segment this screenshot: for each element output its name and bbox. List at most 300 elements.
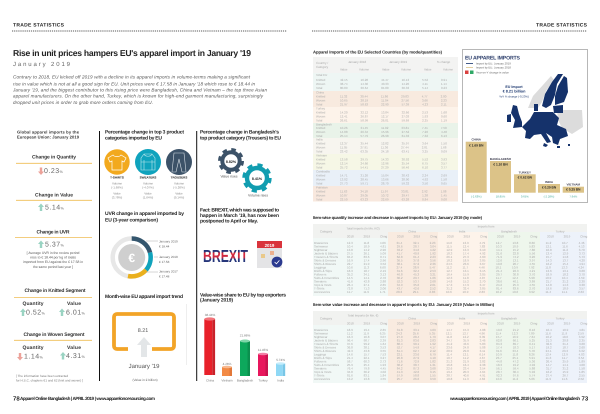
table rows: 14.20 32.12 13.84 32.66 2.53 1.68 bbox=[340, 110, 447, 114]
donut legend: January 2019 bbox=[159, 240, 178, 244]
intro paragraph: January '19, and the biggest contributor to this rising price were Bangladesh, China and Vietnam – the top three Asian bbox=[12, 88, 267, 92]
table header: Volume bbox=[443, 68, 453, 72]
stat: woven segment: Change in Woven Segment bbox=[24, 332, 85, 338]
table: country imports bbox=[313, 57, 458, 202]
table rows: 10.87 29.05 10.72 29.47 1.38 1.45 bbox=[340, 194, 447, 198]
bar: Bangladesh: 18.85% bbox=[496, 194, 506, 198]
table rows: 27.5 26.1 5.09 41.7 40.9 1.92 18.3 17.4 4.92 21.6 22.8 5.56 13.4 12.9 3.73 bbox=[347, 252, 585, 256]
stat: knitted segment: Value bbox=[67, 301, 81, 307]
month label: January '19 bbox=[129, 363, 160, 370]
heading: (January 2019) bbox=[200, 298, 233, 304]
table header: January 2019 bbox=[389, 60, 408, 64]
table header and bands: Turkey bbox=[555, 230, 565, 234]
bar: Turkey: TURKEY bbox=[519, 170, 531, 174]
table rows: Sweaters bbox=[314, 280, 327, 284]
heading: Percentage change in top 3 product bbox=[105, 130, 184, 136]
table rows: 14.71 31.26 15.04 30.42 2.24 2.69 bbox=[340, 174, 447, 178]
column divider 1 bbox=[98, 131, 100, 381]
table rows bbox=[314, 328, 585, 381]
map legend: Import by EU, January 2019 bbox=[476, 62, 511, 66]
table rows: Nightwear bbox=[314, 248, 328, 252]
header: right page: TRADE STATISTICS bbox=[536, 22, 588, 28]
icon: sweater bbox=[135, 149, 161, 175]
table header and bands: Bangladesh bbox=[501, 316, 517, 320]
value label: Value rises bbox=[220, 174, 238, 178]
table header and bands: China bbox=[408, 230, 416, 234]
bar: Turkey bbox=[258, 348, 268, 382]
table header and bands: Total Imports (in Mn. €) bbox=[348, 314, 378, 318]
footer: right page bbox=[449, 396, 589, 402]
Brexit lettering: BREXIT bbox=[203, 246, 248, 266]
table rows: Knitted bbox=[316, 142, 326, 146]
map total label: € 8.21 billion bbox=[503, 90, 526, 94]
fact text: Fact: BREXIT, which was supposed to bbox=[200, 208, 279, 214]
bar: India bbox=[538, 180, 560, 198]
table rows: 13.8 14.2 2.90 33.2 34.6 4.22 12.9 13.3 3.10 14.1 15.2 7.80 10.8 11.2 3.70 bbox=[347, 248, 585, 252]
heading: categories imported by EU bbox=[105, 136, 162, 142]
footer: left page: 78 bbox=[13, 396, 20, 402]
table rows: Total bbox=[316, 198, 323, 202]
icon: value gear: 8.82% bbox=[226, 160, 237, 164]
donut chart: € bbox=[128, 251, 135, 265]
table rows: Woven bbox=[316, 130, 326, 134]
table rows: Knitted bbox=[316, 174, 326, 178]
table header and bands: India bbox=[459, 230, 466, 234]
table rows: 26.61 58.99 26.01 59.69 2.25 1.19 bbox=[340, 118, 447, 122]
bar: Turkey bbox=[514, 170, 536, 198]
source note bbox=[16, 374, 83, 382]
table rows: Knitted bbox=[316, 126, 326, 130]
stat: change in UVR: Change in UVR bbox=[36, 230, 70, 236]
bar: Turkey: € 0.62 BN bbox=[518, 176, 533, 180]
table header: Value bbox=[340, 68, 348, 72]
table header: January 2018 bbox=[348, 60, 367, 64]
table rows: 10.6 11.3 6.60 27.4 28.9 5.47 11.2 11.7 4.46 10.1 10.9 7.92 11.8 12.3 4.24 bbox=[347, 266, 584, 270]
table header and bands bbox=[313, 311, 588, 383]
table rows: Jackets & Blazers bbox=[314, 338, 338, 342]
table rows: Pullovers bbox=[314, 272, 327, 276]
intro paragraph: apparel manufacturers. On the other hand, Turkey, which is known for high-end garment manufacturing, surprisingly bbox=[13, 94, 264, 98]
table header: Category bbox=[316, 65, 329, 69]
category stats: SWEATERS bbox=[140, 176, 156, 180]
table rows: 25.9 25.4 1.93 38.2 38.7 1.31 16.8 16.4 2.38 18.3 19.2 4.92 14.7 14.1 4.08 bbox=[347, 363, 585, 367]
table rows: 18.9 19.4 2.65 31.8 33.1 4.09 14.7 15.3 4.08 19.6 21.2 8.16 10.4 10.9 4.81 bbox=[347, 328, 585, 332]
category stats: Volume bbox=[112, 182, 122, 186]
panel: Brexit fact bbox=[200, 208, 282, 268]
heading: Value-wise share to EU by top exporters bbox=[200, 292, 286, 298]
unit note: (Value in € billion) bbox=[132, 378, 158, 382]
table rows: Total EU bbox=[316, 73, 327, 77]
category stats: Volume bbox=[174, 182, 184, 186]
table: item-wise value bbox=[313, 311, 588, 383]
table rows: 81.6 83.1 1.84 57.9 58.8 1.55 38.7 40.6 4.91 92.3 97.6 5.74 27.4 26.7 2.55 bbox=[347, 374, 585, 378]
table rows: 22.7 21.9 3.52 38.1 37.2 2.36 24.5 23.6 3.67 19.8 20.7 4.55 16.2 15.4 4.94 bbox=[347, 262, 585, 266]
stat: knitted segment: Change in Knitted Segment bbox=[24, 288, 86, 294]
table header and bands: Total Imports (in Mn. KG) bbox=[346, 226, 380, 230]
table rows: 16.3 16.8 3.07 27.9 28.4 1.79 11.8 12.2 3.39 15.7 16.9 7.64 10.2 10.6 3.92 bbox=[347, 335, 585, 339]
table rows: 10.4 10.9 4.81 29.6 28.7 3.04 11.5 12.4 7.83 10.3 10.9 5.83 12.1 11.6 4.13 bbox=[347, 244, 585, 248]
table rows: Woven bbox=[316, 146, 326, 150]
table rows: Knitted bbox=[316, 190, 326, 194]
table rows: Suits & Ensembles bbox=[314, 363, 340, 367]
stat: knitted segment: 0.52% bbox=[26, 310, 46, 316]
source note: [ The information have been extracted bbox=[16, 374, 68, 378]
stat: woven segment: 1.14% bbox=[24, 354, 44, 360]
map total label bbox=[499, 85, 529, 98]
bar: Vietnam: 4.26% bbox=[223, 362, 232, 366]
stat: woven segment bbox=[14, 332, 92, 360]
bar: Bangladesh bbox=[490, 157, 511, 198]
panel heading: European Union: January 2019 bbox=[17, 134, 80, 140]
table rows: 12.37 35.44 12.82 35.97 3.64 1.50 bbox=[340, 142, 447, 146]
bar: India: INDIA bbox=[545, 180, 554, 184]
category stats: TROUSERS bbox=[171, 176, 187, 180]
bar: India: India bbox=[277, 378, 284, 382]
table rows: 80.89 30.64 84.80 30.33 5.14 0.23 bbox=[340, 86, 447, 90]
table rows: Swimwear bbox=[314, 244, 328, 248]
table rows: Tops & Vests bbox=[314, 370, 332, 374]
value: 8.21 bbox=[138, 328, 148, 334]
table rows: Total bbox=[316, 166, 323, 170]
bar: Turkey: Turkey bbox=[258, 378, 268, 382]
donut legend: January 2017 bbox=[159, 270, 178, 274]
icon: trousers bbox=[166, 149, 192, 175]
bar: Turkey: 0.65% bbox=[521, 194, 529, 198]
table rows: Pakistan bbox=[316, 186, 328, 190]
heading: Percentage change in Bangladesh's bbox=[200, 130, 279, 136]
table rows: 36.8 38.1 3.53 52.7 54.9 4.17 23.6 24.8 5.08 17.4 18.3 5.17 19.2 18.7 2.60 bbox=[347, 346, 585, 350]
panel: left stats column bbox=[14, 130, 92, 382]
table rows: 84.2 83.6 0.71 62.8 61.4 2.23 26.1 27.3 4.60 71.9 74.2 3.20 15.7 14.8 5.73 bbox=[347, 255, 585, 259]
table rows: Sweaters bbox=[314, 366, 327, 370]
bar: India: (-2.28%) bbox=[544, 194, 554, 198]
table rows bbox=[314, 241, 585, 294]
heading: Month-wise EU apparel import trend bbox=[105, 294, 183, 300]
bar: India bbox=[276, 358, 285, 382]
stat: change in quantity: 0.23% bbox=[44, 168, 64, 175]
UVR note: the same period last year ] bbox=[33, 265, 73, 269]
donut legend: € 18.44 bbox=[159, 244, 170, 248]
category stats: (1.64%) bbox=[143, 196, 153, 200]
bar: Vietnam: VIETNAM bbox=[567, 183, 581, 187]
table header bbox=[313, 57, 458, 73]
table rows: Leggings bbox=[314, 352, 327, 356]
panel: Bangladesh trousers bbox=[200, 130, 281, 198]
category stats: (-1.69%) bbox=[111, 186, 123, 190]
intro paragraph: Contrary to 2018, EU kicked off 2019 with a decline in its apparel imports in volume-terms making a significant bbox=[13, 74, 251, 80]
map legend: Year-on-Y change in value bbox=[476, 70, 509, 74]
header: left page: TRADE STATISTICS bbox=[13, 22, 65, 28]
category stats: (3.78%) bbox=[112, 196, 122, 200]
stat: change in quantity bbox=[16, 154, 92, 175]
table rows: 11.2 11.9 6.25 24.3 25.6 5.35 12.1 12.7 4.96 11.4 12.3 7.89 11.6 11.9 2.59 bbox=[347, 332, 584, 336]
stat: change in UVR bbox=[15, 230, 92, 248]
table rows: Accessories bbox=[314, 290, 331, 294]
table rows: Woven bbox=[316, 162, 326, 166]
table rows: 14.6 15.7 7.53 22.1 23.6 6.79 11.4 12.1 6.14 10.9 11.8 8.26 12.4 12.9 4.03 bbox=[347, 352, 585, 356]
intro paragraph bbox=[12, 74, 267, 105]
table rows: 10.26 31.45 11.02 33.81 7.41 7.50 bbox=[340, 126, 447, 130]
bar: China: 38.44% bbox=[205, 313, 215, 317]
table title: item-wise value: Item-wise value increase and decrease in apparel imports by EU: January 2019 (Value in Million) bbox=[313, 302, 495, 307]
panel: exporters bar chart bbox=[200, 292, 286, 382]
icon: calendar: 2019 bbox=[265, 243, 275, 248]
table header and bands: India bbox=[459, 316, 466, 320]
table rows: Knitted bbox=[316, 78, 326, 82]
table rows: Cambodia bbox=[316, 170, 330, 174]
column divider 2 bbox=[196, 131, 198, 381]
table rows: Trousers & Shorts bbox=[314, 255, 339, 259]
table rows: 25.14 57.79 26.98 61.33 7.32 6.13 bbox=[340, 134, 447, 138]
category stats: Value bbox=[113, 192, 121, 196]
table rows: Total bbox=[316, 102, 323, 106]
panel: top 3 product categories bbox=[104, 130, 192, 200]
table header: Value bbox=[382, 68, 390, 72]
table rows: Skirts & Dresses bbox=[314, 346, 337, 350]
table rows: Woven bbox=[316, 114, 326, 118]
map total label: YoY % change (-0.23%) bbox=[499, 94, 529, 98]
bar: Vietnam: Vietnam bbox=[221, 378, 233, 382]
table rows: Woven bbox=[316, 82, 326, 86]
bar: Vietnam: € 0.25 BN bbox=[566, 188, 581, 192]
map legend bbox=[465, 62, 511, 74]
table rows: Vietnam bbox=[316, 154, 327, 158]
bar: Vietnam bbox=[563, 183, 584, 198]
table rows: Accessories bbox=[314, 377, 331, 381]
map legend: Import by EU, January 2018 bbox=[476, 66, 511, 70]
table header and bands: Turkey bbox=[555, 316, 565, 320]
table rows: 11.32 30.44 11.86 29.83 4.77 2.00 bbox=[340, 94, 447, 98]
stat: change in UVR: 5.37% bbox=[45, 242, 65, 248]
table rows bbox=[316, 73, 447, 202]
table rows: 13.02 28.45 13.66 28.90 4.92 1.58 bbox=[340, 178, 447, 182]
table rows: Knitted bbox=[316, 94, 326, 98]
UVR note bbox=[23, 251, 83, 269]
table rows: 12.14 24.66 12.96 25.54 6.75 3.57 bbox=[340, 162, 447, 166]
table rows: Woven bbox=[316, 178, 326, 182]
table rows: Briefs & Slips bbox=[314, 269, 332, 273]
heading: EU (3-year comparison) bbox=[105, 218, 158, 224]
table rows: Knitted bbox=[316, 158, 326, 162]
table rows: 21.97 58.63 22.90 57.39 4.23 2.11 bbox=[340, 102, 447, 106]
stat: change in quantity: Change in Quantity bbox=[32, 154, 76, 160]
donut legend: € 17.48 bbox=[159, 274, 170, 278]
table rows: 97.6 99.2 1.64 88.4 90.1 1.92 41.2 43.6 5.83 84.3 89.7 6.41 32.6 31.4 3.68 bbox=[347, 342, 585, 346]
bar: Bangladesh: BANGLADESH bbox=[490, 157, 511, 161]
table rows: 11.05 27.91 11.36 27.44 2.81 1.68 bbox=[340, 146, 447, 150]
donut legend: January 2018 bbox=[159, 255, 178, 259]
date subtitle: January 2019 bbox=[13, 61, 71, 68]
table rows: 42.15 16.28 44.47 16.13 5.52 0.91 bbox=[340, 78, 447, 82]
icon: up arrow bbox=[137, 337, 151, 357]
bar: China bbox=[466, 138, 487, 198]
stat: knitted segment: 6.01% bbox=[66, 310, 86, 316]
intro paragraph: dropped unit prices in order to grab more orders coming from EU. bbox=[13, 100, 153, 105]
table rows: 10.65 28.19 11.04 27.56 3.66 2.23 bbox=[340, 98, 447, 102]
category stats: T-SHIRTS bbox=[110, 176, 124, 180]
bar: China: € 1.69 BN bbox=[469, 144, 484, 148]
table rows: 12.41 26.87 12.17 27.03 1.93 0.60 bbox=[340, 114, 447, 118]
panel frame bbox=[462, 50, 588, 202]
stat: knitted segment bbox=[14, 288, 92, 316]
table rows: 41.6 42.8 2.88 52.3 53.7 2.68 14.8 15.2 2.70 38.6 40.1 3.89 21.7 21.2 2.30 bbox=[347, 280, 585, 284]
table rows: Suits & Ensembles bbox=[314, 276, 340, 280]
bar: Bangladesh: Bangladesh bbox=[237, 378, 253, 382]
table rows: Woven bbox=[316, 98, 326, 102]
table rows: Trousers & Shorts bbox=[314, 342, 339, 346]
table rows: China bbox=[316, 90, 324, 94]
table rows: 11.63 34.18 11.97 33.81 2.92 1.08 bbox=[340, 190, 447, 194]
table rows: Briefs & Slips bbox=[314, 356, 332, 360]
donut legend: € 17.58 bbox=[159, 260, 170, 264]
category stats: Value bbox=[144, 192, 152, 196]
table header and bands: Category bbox=[320, 316, 333, 320]
map total label: EU Import bbox=[505, 85, 523, 89]
table rows: 35.2 34.1 3.13 46.8 45.3 3.21 16.4 15.9 3.05 29.7 30.8 3.70 18.9 18.2 3.70 bbox=[347, 272, 585, 276]
table rows: 72.8 71.3 2.06 43.7 42.6 2.52 31.2 32.4 3.85 81.4 83.6 2.70 19.6 18.9 3.57 bbox=[347, 286, 585, 290]
table title: country imports: Apparel Imports of the EU Selected Countries (by mode/quantities) bbox=[313, 50, 443, 54]
table header: % change bbox=[437, 60, 451, 64]
bar: India: € 0.29 BN bbox=[542, 186, 557, 190]
icon: volume gear: 8.41% bbox=[252, 177, 263, 181]
table header and bands: Category bbox=[320, 230, 333, 234]
table rows: Total bbox=[316, 182, 323, 186]
donut legend bbox=[146, 240, 178, 278]
category stats: (-5.26%) bbox=[173, 186, 185, 190]
footer: left page bbox=[13, 396, 155, 402]
table rows: Total bbox=[316, 150, 323, 154]
intro paragraph: rise in value which is not at all a good sign for EU. Unit prices were € 17.58 in January '18 which rose to € 18.44 in bbox=[13, 82, 255, 86]
bar: Vietnam: 7.94% bbox=[569, 194, 578, 198]
table header: Volume bbox=[359, 68, 369, 72]
table header: Volume bbox=[401, 68, 411, 72]
footer: right page: 73 bbox=[582, 396, 589, 402]
bar: Vietnam bbox=[221, 362, 233, 382]
table rows: Turkey bbox=[316, 106, 326, 110]
table rows: 25.72 54.41 27.29 56.46 6.10 3.77 bbox=[340, 166, 447, 170]
category stats: (9.14%) bbox=[174, 196, 184, 200]
table header and bands: Bangladesh bbox=[501, 230, 517, 234]
table rows: 58.7 60.3 2.73 71.6 72.9 1.82 21.3 21.9 2.82 44.8 47.2 5.36 26.4 25.9 1.89 bbox=[347, 360, 585, 364]
table rows: T-Shirts bbox=[314, 286, 325, 290]
bar: Bangladesh bbox=[237, 334, 253, 382]
table rows: Skirts & Dresses bbox=[314, 258, 337, 262]
category stats: (-4.07%) bbox=[142, 186, 154, 190]
stat: woven segment: 4.31% bbox=[66, 353, 86, 360]
table header: Country / bbox=[316, 61, 328, 65]
table rows: Woven bbox=[316, 194, 326, 198]
panel heading: Global apparel imports by the bbox=[17, 130, 80, 134]
table rows: 23.42 63.35 24.18 63.41 3.25 0.09 bbox=[340, 150, 447, 154]
table rows: Knitted bbox=[316, 110, 326, 114]
table rows: 22.50 63.23 22.69 63.28 0.84 0.08 bbox=[340, 198, 447, 202]
category stats: Value bbox=[175, 192, 183, 196]
table header and bands: Imports from bbox=[478, 224, 495, 228]
title: Rise in unit prices hampers EU's apparel import in January '19 bbox=[13, 48, 251, 58]
table title: item-wise quantity: Item-wise quantity increase and decrease in apparel imports by EU: January 2019 (by mode) bbox=[313, 215, 483, 220]
table rows: Total bbox=[316, 118, 323, 122]
table rows: Shirts & Blouses bbox=[314, 349, 337, 353]
heading: UVR change in apparel imported by bbox=[105, 211, 184, 217]
table rows: Shirts & Blouses bbox=[314, 262, 337, 266]
stat: change in value: 5.14% bbox=[45, 204, 65, 212]
stat: change in value: Change in Value bbox=[35, 192, 73, 198]
table rows: Tops & Vests bbox=[314, 283, 332, 287]
table rows: Jackets & Blazers bbox=[314, 252, 338, 256]
table rows: Brassieres bbox=[314, 328, 329, 332]
bar: China: China bbox=[206, 378, 214, 382]
table rows: 96.4 98.7 2.39 81.3 83.6 2.83 34.7 35.9 3.46 62.8 66.1 5.25 21.3 20.8 2.35 bbox=[347, 338, 585, 342]
stat: woven segment: Quantity bbox=[22, 345, 44, 351]
bar: China: (-2.63%) bbox=[471, 194, 482, 198]
panel: month-wise trend bbox=[105, 294, 186, 382]
stat: change in value bbox=[16, 192, 92, 212]
footer: left page: Apparel Online Bangladesh | APRIL 2019 | www.appareloncesourcing.com bbox=[20, 396, 155, 402]
table rows: Pullovers bbox=[314, 360, 327, 364]
stat: knitted segment: Quantity bbox=[22, 301, 44, 307]
table rows: Brassieres bbox=[314, 241, 329, 245]
bar: China bbox=[204, 313, 215, 382]
table rows: Bangladesh bbox=[316, 122, 332, 126]
UVR note: rose to € 18.44 per kg of totals bbox=[30, 256, 76, 260]
bar: India: 5.74% bbox=[276, 358, 285, 362]
table header: Value bbox=[424, 68, 432, 72]
table rows: 42.3 43.8 3.55 61.4 62.7 2.12 28.9 29.8 3.11 31.6 33.4 5.70 24.1 23.3 3.32 bbox=[347, 349, 585, 353]
table bands bbox=[313, 73, 458, 202]
table rows: 12.3 11.8 4.06 31.4 32.1 2.23 14.6 13.9 4.79 12.7 13.8 8.66 11.2 10.7 4.46 bbox=[347, 241, 585, 245]
frame bbox=[114, 314, 174, 349]
table rows: India bbox=[316, 138, 323, 142]
bar: Bangladesh: € 1.10 BN bbox=[493, 162, 508, 166]
volume label: Volume rises bbox=[248, 194, 268, 198]
bar: China: CHINA bbox=[471, 138, 482, 142]
table rows: 18.3 18.7 2.19 31.6 32.4 2.53 12.7 13.1 3.15 21.4 22.3 4.21 13.6 13.1 3.68 bbox=[347, 269, 585, 273]
panel: UVR donut bbox=[105, 211, 184, 278]
fact text: postponed to April or May. bbox=[200, 218, 259, 224]
table rows: 13.2 13.8 4.55 25.7 26.6 3.50 10.8 11.3 4.63 10.6 11.2 5.66 11.9 11.6 2.52 bbox=[347, 377, 584, 381]
table: item-wise quantity bbox=[313, 224, 588, 296]
map of Europe bbox=[507, 74, 583, 148]
bar: Bangladesh: 21.86% bbox=[240, 334, 250, 338]
category stats: Volume bbox=[143, 182, 153, 186]
UVR note: imported from EU against the € 17.58 in bbox=[23, 260, 83, 264]
heading: top product category (Trousers) to EU bbox=[200, 136, 281, 142]
table header and bands: 2018 2019 Chng 2018 2019 Chng 2018 2019 Chng 2018 2019 Chng 2018 2019 Chng bbox=[347, 234, 588, 238]
table rows: 34.8 36.2 4.02 41.3 42.6 3.15 19.4 20.3 4.64 28.7 30.4 5.92 16.2 15.9 1.85 bbox=[347, 370, 585, 374]
table rows: Leggings bbox=[314, 266, 327, 270]
table rows: 16.9 17.4 2.96 36.5 37.8 3.56 18.2 18.9 3.85 12.6 13.1 3.97 14.3 13.7 4.20 bbox=[347, 258, 585, 262]
icon: t-shirt bbox=[104, 149, 130, 175]
table rows: Total bbox=[316, 134, 323, 138]
table header and bands: 2018 2019 Chng 2018 2019 Chng 2018 2019 Chng 2018 2019 Chng 2018 2019 Chng bbox=[347, 322, 588, 326]
table rows: 13.58 29.75 14.33 30.92 5.52 3.93 bbox=[340, 158, 447, 162]
table rows: T-Shirts bbox=[314, 374, 325, 378]
category stats bbox=[110, 176, 187, 200]
table rows: Total bbox=[316, 86, 323, 90]
table header and bands: China bbox=[408, 316, 416, 320]
table rows: 14.5 14.1 2.76 30.2 29.7 1.66 12.3 11.8 4.07 11.7 12.4 5.98 10.9 10.4 4.59 bbox=[347, 276, 585, 280]
table rows: 21.4 22.1 3.27 26.8 27.9 4.10 10.7 11.2 4.67 23.7 25.1 5.91 11.3 11.7 3.54 bbox=[347, 356, 585, 360]
table rows: 14.88 26.34 15.96 27.52 7.26 4.48 bbox=[340, 130, 447, 134]
table rows: 26.4 27.1 2.65 34.9 35.6 2.01 17.3 17.9 3.47 24.2 25.3 4.55 14.8 14.3 3.38 bbox=[347, 283, 585, 287]
table rows: 11.7 11.9 1.71 28.3 29.1 2.83 10.6 10.9 2.83 10.2 10.6 3.92 11.4 11.1 2.63 bbox=[347, 290, 584, 294]
map heading: EU APPAREL IMPORTS bbox=[465, 56, 521, 62]
table rows: 27.73 59.71 28.70 59.32 3.50 0.65 bbox=[340, 182, 447, 186]
fact text: happen in March '19, has now been bbox=[200, 213, 279, 219]
table rows: Nightwear bbox=[314, 335, 328, 339]
bar: Turkey: 11.45% bbox=[258, 348, 268, 352]
panel: EU apparel imports map bbox=[462, 50, 588, 202]
